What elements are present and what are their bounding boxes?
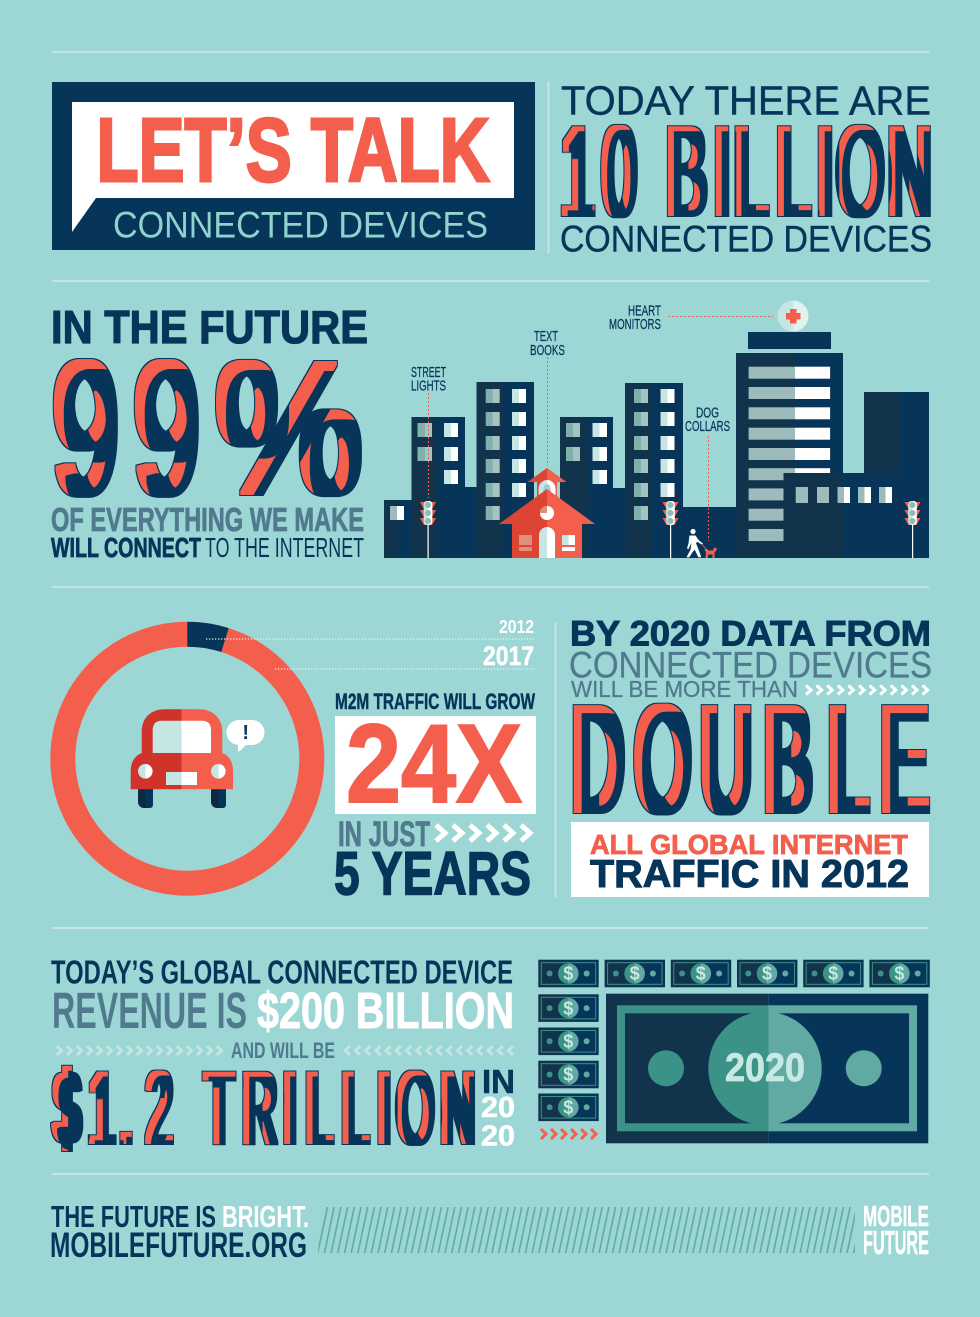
dotted leader lines (428, 316, 773, 541)
icon: small bill (538, 960, 599, 987)
icon: speech bubble exclamation: ! (242, 722, 249, 744)
label: heart monitors: MONITORS (609, 316, 661, 333)
label: dog collars: COLLARS (685, 418, 730, 435)
label: heart monitors (609, 302, 661, 333)
icon: small bill: $ (630, 964, 640, 984)
text: in just: IN JUST (338, 815, 430, 854)
panel: m2m traffic (206, 617, 536, 908)
speech bubble (72, 102, 514, 232)
icon: heart monitor cross (778, 300, 808, 332)
icon: small bill (803, 960, 864, 987)
text: in 2020 stacked: 20 (481, 1092, 515, 1124)
icon: traffic light right (904, 501, 920, 558)
big word: double: DOUBLE (572, 674, 928, 843)
building: tall left (476, 382, 534, 558)
panel: double (569, 614, 932, 897)
building: small left (384, 500, 412, 558)
icon: small bill: $ (563, 964, 573, 984)
panel: donut and car (63, 622, 312, 883)
icon: small bill: $ (563, 1032, 573, 1052)
text: the future is: THE FUTURE IS (51, 1199, 216, 1234)
building: back right (864, 392, 929, 558)
big number: 10 billion: 10 BILLION (561, 100, 931, 244)
building: hospital tower (736, 332, 843, 558)
label: street lights: STREET (411, 364, 446, 381)
text: and will be: AND WILL BE (231, 1038, 335, 1063)
icon: speech bubble exclamation (226, 720, 264, 752)
icon: traffic light left (420, 501, 436, 558)
text: $200 billion: $200 BILLION (257, 982, 514, 1039)
chevrons left (345, 1046, 513, 1055)
icon: small bill: $ (696, 964, 706, 984)
icon: small bill: $ (563, 1098, 573, 1118)
icon: small bill: $ (563, 1065, 573, 1085)
icon: traffic light center (662, 501, 678, 558)
panel: 10 billion devices (560, 78, 932, 260)
icon: small bill (671, 960, 731, 987)
label: 2012: 2012 (499, 617, 534, 637)
text: in 2020 stacked (481, 1064, 515, 1152)
panel: footer (50, 1199, 929, 1265)
heading: in the future: IN THE FUTURE (51, 301, 368, 353)
text: of everything we make: OF EVERYTHING WE MAKE (51, 502, 364, 539)
callout box: all global internet traffic: ALL GLOBAL INTERNET (590, 829, 908, 860)
icon: small bill (538, 1061, 599, 1088)
icon: person walking (686, 529, 703, 557)
hatch band (318, 1207, 855, 1253)
logo: mobile future (863, 1201, 929, 1262)
label: dog collars: DOG (696, 404, 719, 422)
text: 5 years: 5 YEARS (334, 840, 531, 908)
panel: title speech bubble (52, 82, 535, 250)
subtitle: connected devices: CONNECTED DEVICES (113, 204, 488, 246)
text: mobilefuture.org: MOBILEFUTURE.ORG (50, 1226, 307, 1265)
dotted year lines (206, 639, 535, 669)
icon: small bill (538, 1094, 599, 1121)
callout box: all global internet traffic (571, 822, 929, 897)
text: will be more than: WILL BE MORE THAN (571, 676, 798, 702)
icon: small bill (538, 994, 599, 1022)
chevrons (806, 686, 928, 694)
big number: 99%: 99 (53, 323, 198, 534)
label: dog collars (685, 404, 730, 435)
panel: city illustration (384, 300, 929, 558)
text: in 2020 stacked: 20 (481, 1120, 515, 1152)
text: in 2020 stacked: IN (482, 1064, 515, 1101)
label: text books: TEXT (534, 328, 558, 345)
icon: dog (702, 544, 717, 558)
panel: 99 percent (51, 301, 368, 563)
icon: small bill (605, 960, 665, 987)
label: text books: BOOKS (530, 342, 565, 359)
building: school (499, 468, 595, 558)
large bill 2020: 2020 (725, 1046, 805, 1090)
building: left mid (412, 417, 477, 558)
label: street lights (411, 364, 446, 394)
panel: money illustration (538, 960, 930, 1143)
title: let's talk: LET’S TALK (96, 101, 490, 201)
icon: car (131, 709, 233, 808)
icon: small bill: $ (894, 964, 904, 984)
text: will connect: WILL CONNECT (51, 532, 201, 563)
text: bright: BRIGHT. (222, 1199, 309, 1234)
donut chart (63, 622, 312, 883)
text: connected devices: CONNECTED DEVICES (560, 218, 932, 260)
icon: small bill (869, 960, 930, 987)
icon: small bill: $ (762, 964, 772, 984)
chevrons right (57, 1046, 222, 1055)
label: text books (530, 328, 565, 359)
icon: small bill (737, 960, 797, 987)
label: 2017: 2017 (483, 641, 534, 671)
label: street lights: LIGHTS (411, 378, 446, 394)
logo: mobile future: MOBILE (863, 1201, 929, 1233)
text: connected devices: CONNECTED DEVICES (569, 644, 932, 686)
text: to the internet: TO THE INTERNET (205, 532, 364, 563)
icon: small bill: $ (563, 998, 573, 1018)
icon: small bill: $ (828, 964, 838, 984)
big number: 99% (53, 321, 362, 534)
heading: today there are: TODAY THERE ARE (561, 78, 931, 124)
heading: by 2020 data from: BY 2020 DATA FROM (570, 614, 931, 654)
chevrons (436, 825, 530, 841)
text: revenue is: REVENUE IS (52, 982, 247, 1039)
callout box: all global internet traffic: TRAFFIC IN 2012 (590, 853, 909, 896)
icon: small bill (538, 1028, 599, 1055)
big number: $1.2 trillion: $1.2 TRILLION (54, 1050, 474, 1167)
panel: revenue (51, 954, 515, 1167)
large bill 2020 (606, 994, 928, 1143)
text: m2m traffic will grow: M2M TRAFFIC WILL GROW (335, 689, 535, 714)
text: today's global connected device: TODAY’S GLOBAL CONNECTED DEVICE (51, 954, 513, 992)
big number: 99%: % (215, 321, 362, 533)
red chevrons (541, 1129, 596, 1139)
label: heart monitors: HEART (628, 302, 661, 320)
building: center mid (560, 417, 625, 558)
callout box: 24x: 24X (346, 702, 522, 826)
building: front right (784, 473, 929, 558)
building: tall center (625, 383, 737, 558)
